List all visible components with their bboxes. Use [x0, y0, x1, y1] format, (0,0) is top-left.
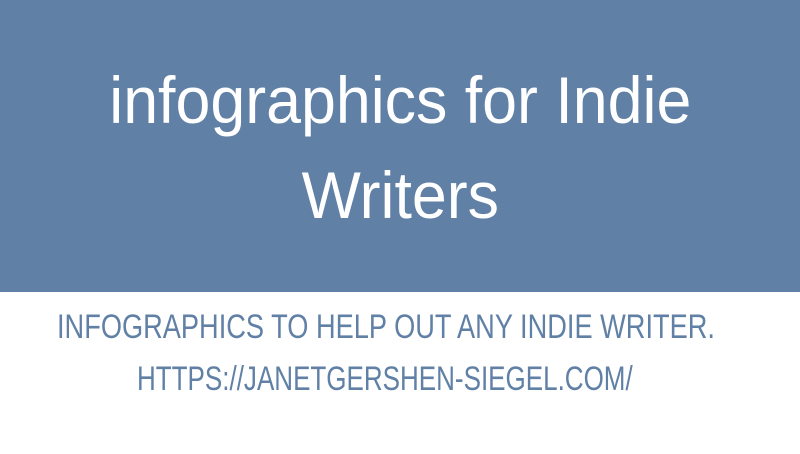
- panel: title banner: [0, 0, 800, 292]
- subtitle: INFOGRAPHICS TO HELP OUT ANY INDIE WRITER.: [57, 308, 715, 346]
- title line 2: Writers: [302, 158, 499, 232]
- url: HTTPS://JANETGERSHEN-SIEGEL.COM/: [137, 360, 633, 398]
- title line 1: infographics for Indie: [109, 63, 691, 137]
